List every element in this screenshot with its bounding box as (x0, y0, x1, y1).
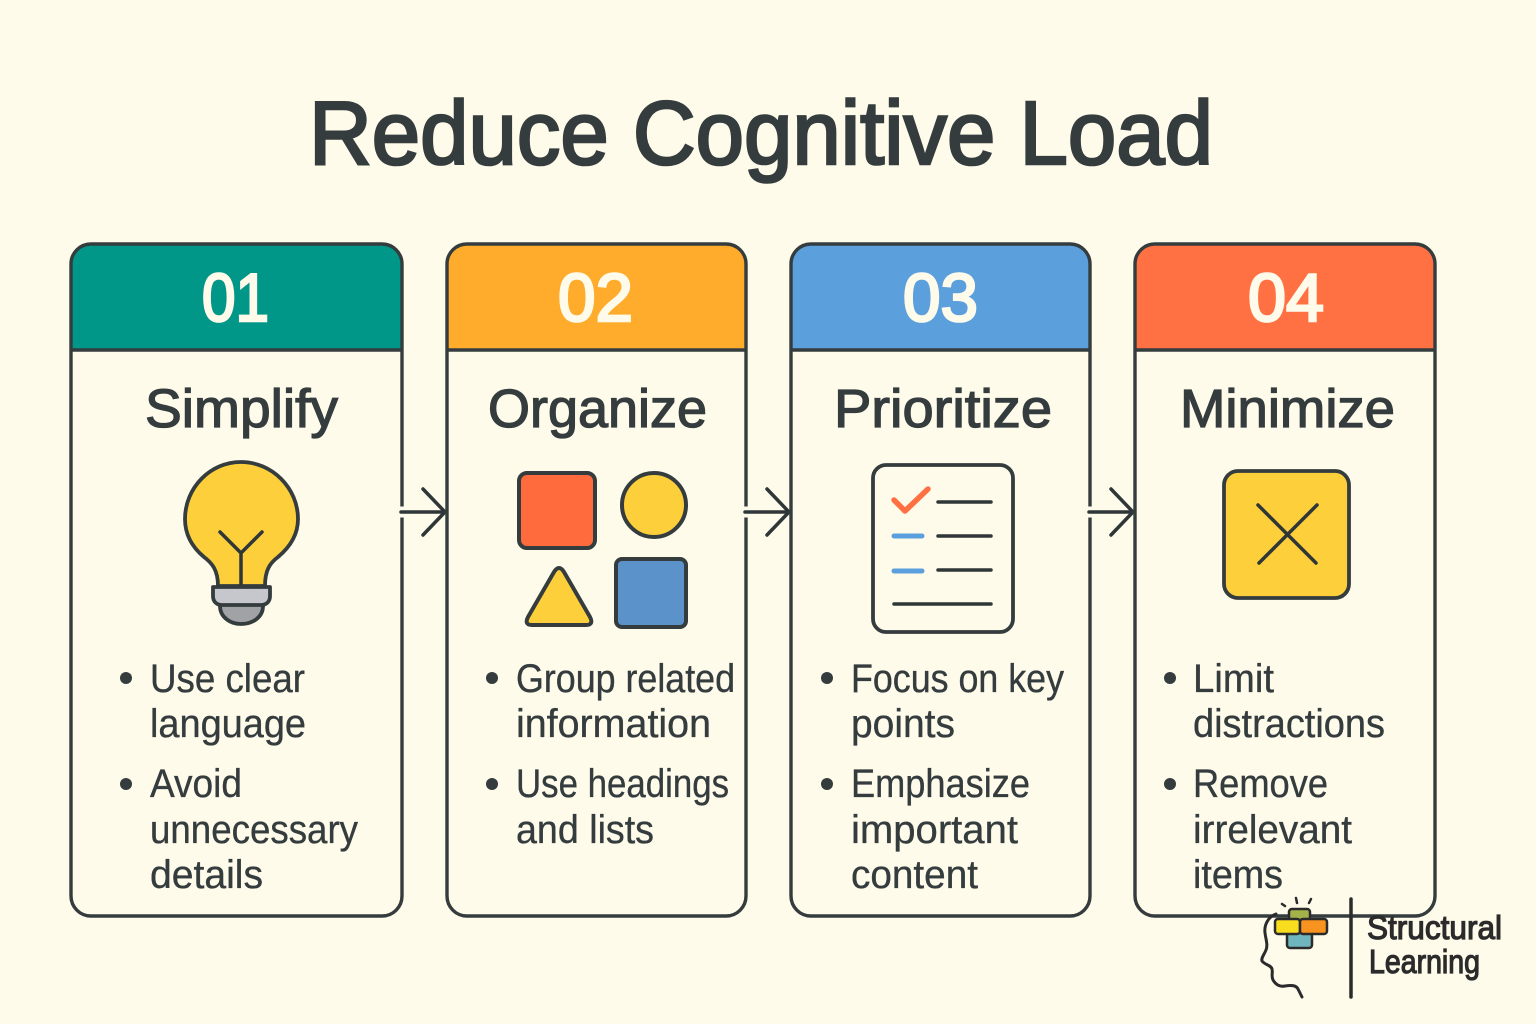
title: Reduce Cognitive Load (309, 84, 1213, 184)
header band 01: 01 (202, 260, 269, 336)
bullet list 04: items (1193, 853, 1283, 897)
header band 04: 04 (1248, 260, 1324, 336)
header band 01 (71, 244, 402, 350)
panel: 04 Minimize (1135, 244, 1435, 916)
logo wordmark: Structural (1367, 909, 1502, 946)
icon: X box (1224, 471, 1349, 598)
bullet list 02: and lists (516, 808, 654, 852)
header band 02 (447, 244, 746, 350)
header band 04 (1135, 244, 1435, 350)
icon: checklist (873, 465, 1013, 632)
bullet list 01: details (150, 853, 263, 897)
icon: light bulb (185, 462, 298, 624)
heading: Minimize: Minimize (1180, 379, 1395, 439)
bullet list 03: Emphasize (851, 762, 1030, 806)
bullet list 01: language (150, 702, 306, 746)
bullet list 02: Use headings (516, 762, 729, 806)
bullet list 03: Focus on key (851, 657, 1064, 701)
arrow: 03 to 04 (1086, 489, 1133, 535)
header band 03: 03 (903, 260, 978, 336)
logo tiles (1275, 898, 1327, 948)
heading: Prioritize: Prioritize (834, 379, 1052, 439)
bullet list 04: irrelevant (1193, 808, 1352, 852)
heading: Organize: Organize (488, 379, 707, 439)
bullet list 03: content (851, 853, 978, 897)
heading: Simplify: Simplify (145, 379, 338, 439)
logo wordmark: Learning (1369, 943, 1480, 980)
arrow: 01 to 02 (398, 489, 445, 535)
bullet list 02 (486, 657, 735, 852)
header band 02: 02 (558, 260, 633, 336)
bullet list 01: Avoid (150, 762, 242, 806)
bullet list 01: unnecessary (150, 808, 358, 852)
bullet list 04: Remove (1193, 762, 1328, 806)
bullet list 03: important (851, 808, 1018, 852)
panel: 02 Organize (447, 244, 746, 916)
logo wordmark (1367, 909, 1502, 980)
icon: shapes (519, 473, 686, 627)
bullet list 03: points (851, 702, 955, 746)
logo head outline (1262, 914, 1302, 997)
bullet list 02: Group related (516, 657, 735, 701)
panel: 01 Simplify (71, 244, 402, 916)
bullet list 04: Limit (1193, 657, 1274, 701)
bullet list 04: distractions (1193, 702, 1385, 746)
bullet list 01: Use clear (150, 657, 305, 701)
bullet list 02: information (516, 702, 711, 746)
bullet list 03 (821, 657, 1064, 897)
bullet list 04 (1164, 657, 1385, 897)
bullet list 01 (120, 657, 358, 897)
arrow: 02 to 03 (742, 489, 789, 535)
logo: Structural Learning (1262, 898, 1502, 997)
panel: 03 Prioritize (791, 244, 1090, 916)
header band 03 (791, 244, 1090, 350)
